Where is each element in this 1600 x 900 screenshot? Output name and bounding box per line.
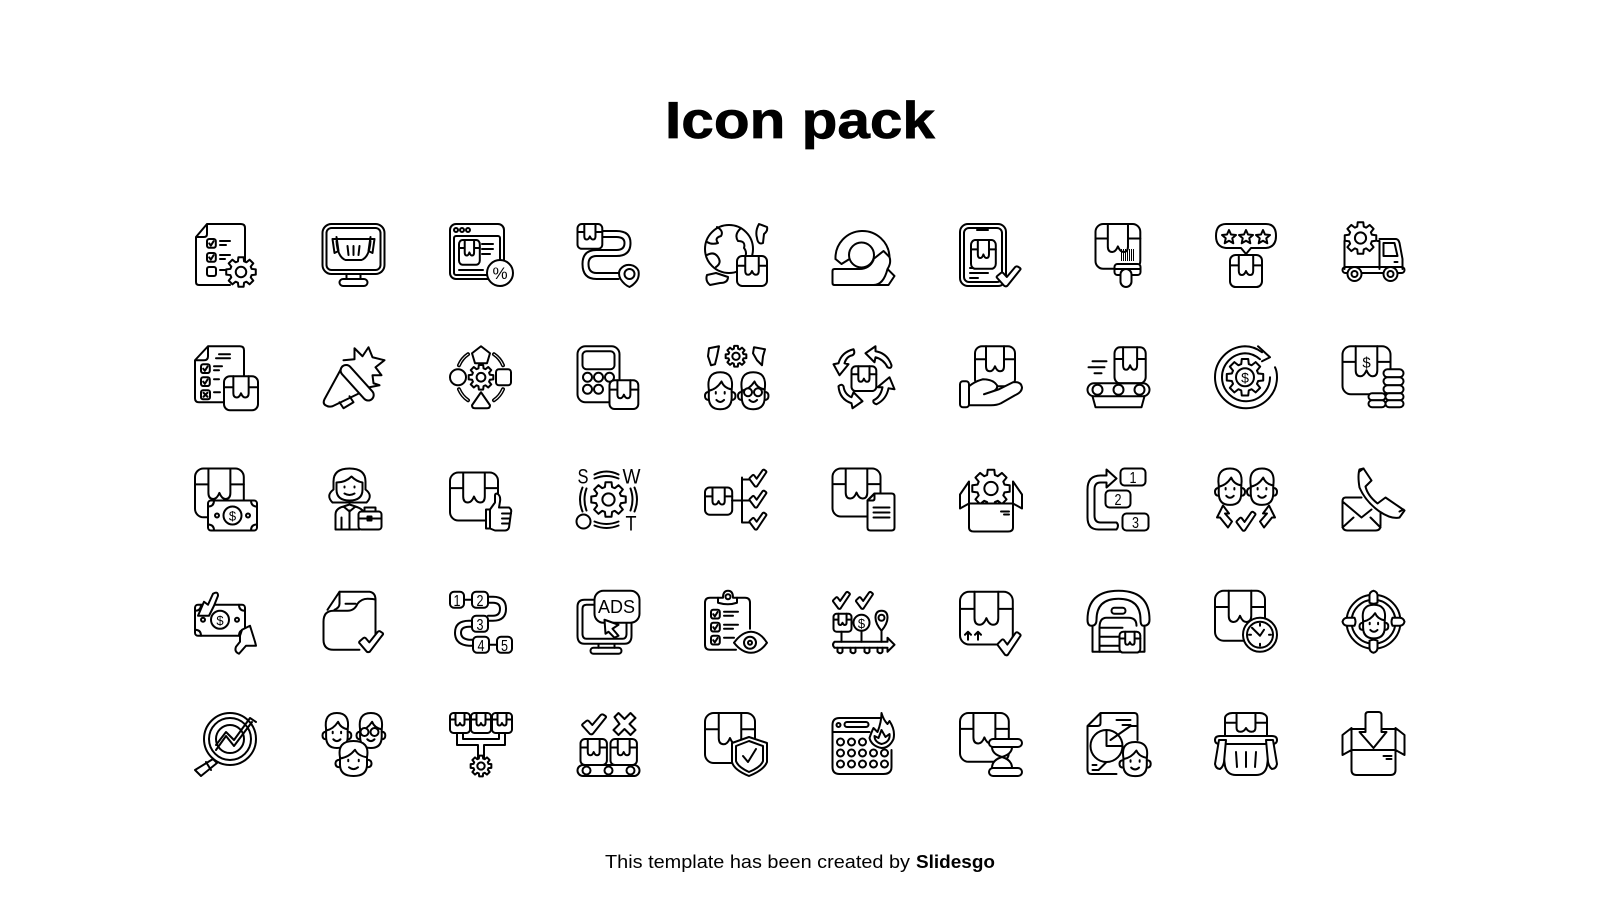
title: Icon pack xyxy=(665,92,935,150)
icon: conveyor with box xyxy=(1088,347,1150,407)
icon: clipboard with eye xyxy=(705,591,767,653)
icon: monitor with ads xyxy=(578,591,640,654)
icon: box with document xyxy=(832,468,894,530)
icon: megaphone xyxy=(324,347,384,408)
icon: donut with circular arrow xyxy=(832,231,894,285)
icon: star rating with box xyxy=(1216,224,1276,287)
icon: milestones timeline xyxy=(833,592,894,653)
icon: calculator with box xyxy=(578,346,638,409)
icon: hand holding box xyxy=(960,346,1022,407)
icon: box with banknote xyxy=(195,468,257,530)
icon: box with thumbs up xyxy=(450,472,511,530)
icon: team with gear xyxy=(705,346,768,409)
icon: monitor with basket xyxy=(322,224,384,286)
icon: checklist document with box xyxy=(195,346,258,410)
icon: three boxes with gear xyxy=(450,713,512,776)
icon: box with clock xyxy=(1215,591,1277,652)
icon: warehouse xyxy=(1088,591,1150,653)
icon: browser discount: % xyxy=(492,264,508,283)
icon: SWOT gear: W xyxy=(622,466,641,488)
icon: box with shield xyxy=(705,713,767,776)
icon: folder with check xyxy=(324,592,383,652)
icon: box with dollar and coins: $ xyxy=(1362,354,1371,371)
icon: banknote exchange: $ xyxy=(216,613,224,628)
icon: target with face xyxy=(1342,591,1404,653)
icon: box with cycle arrows xyxy=(834,346,894,408)
icon: open box with down arrow xyxy=(1342,712,1404,775)
icon: numbered path: 3 xyxy=(476,617,484,634)
icon: checklist document with gear xyxy=(196,224,256,287)
icon: globe with box xyxy=(705,224,767,286)
icon: box with up arrows and check xyxy=(960,592,1021,655)
icon: SWOT gear: T xyxy=(626,512,637,536)
icon: truck with gear xyxy=(1342,222,1404,281)
icon: box with barcode scanner xyxy=(1096,224,1140,287)
icon: numbered path: 5 xyxy=(501,638,508,655)
footer credit: This template has been created by xyxy=(605,852,910,872)
icon: box route to pin xyxy=(578,224,639,287)
icon: box with banknote: $ xyxy=(229,508,237,524)
icon: open box with gear xyxy=(960,470,1022,532)
icon: numbered steps with arrow: 3 xyxy=(1132,515,1139,532)
icon: SWOT gear xyxy=(576,466,641,536)
icon: numbered path: 4 xyxy=(478,638,485,655)
icon: circular dollar gear xyxy=(1215,346,1277,408)
icon: monitor with ads: ADS xyxy=(598,597,635,617)
icon: envelope with phone xyxy=(1342,468,1404,530)
icon: numbered steps with arrow: 2 xyxy=(1114,492,1122,509)
icon: magnifier analytics xyxy=(195,713,256,776)
icon: numbered path xyxy=(450,592,512,655)
icon: box with hourglass xyxy=(960,713,1022,776)
icon: quality control conveyor xyxy=(578,713,640,776)
icon: numbered path: 2 xyxy=(476,593,484,610)
icon: SWOT gear: S xyxy=(578,466,588,488)
icon: numbered steps with arrow xyxy=(1088,468,1148,532)
icon: box with dollar and coins xyxy=(1342,346,1404,407)
icon: circular dollar gear: $ xyxy=(1241,369,1249,385)
footer credit: Slidesgo xyxy=(916,852,995,872)
icon: basket with box xyxy=(1215,713,1277,775)
icon: browser discount xyxy=(450,224,513,286)
icon: shapes around gear xyxy=(450,346,511,408)
icon grid xyxy=(195,222,1404,776)
icon: numbered steps with arrow: 1 xyxy=(1130,470,1137,487)
icon: numbered path: 1 xyxy=(454,593,461,610)
icon: milestones timeline: $ xyxy=(858,616,866,631)
icon: banknote exchange xyxy=(195,593,256,654)
icon: box with three checks xyxy=(705,470,766,530)
icon: calendar with fire xyxy=(832,713,894,774)
icon: phone order with check xyxy=(960,224,1021,286)
icon: three people xyxy=(322,713,385,776)
icon: businesswoman with briefcase xyxy=(329,468,382,530)
icon: two people agreement xyxy=(1215,468,1277,531)
icon: report with person xyxy=(1088,713,1151,776)
